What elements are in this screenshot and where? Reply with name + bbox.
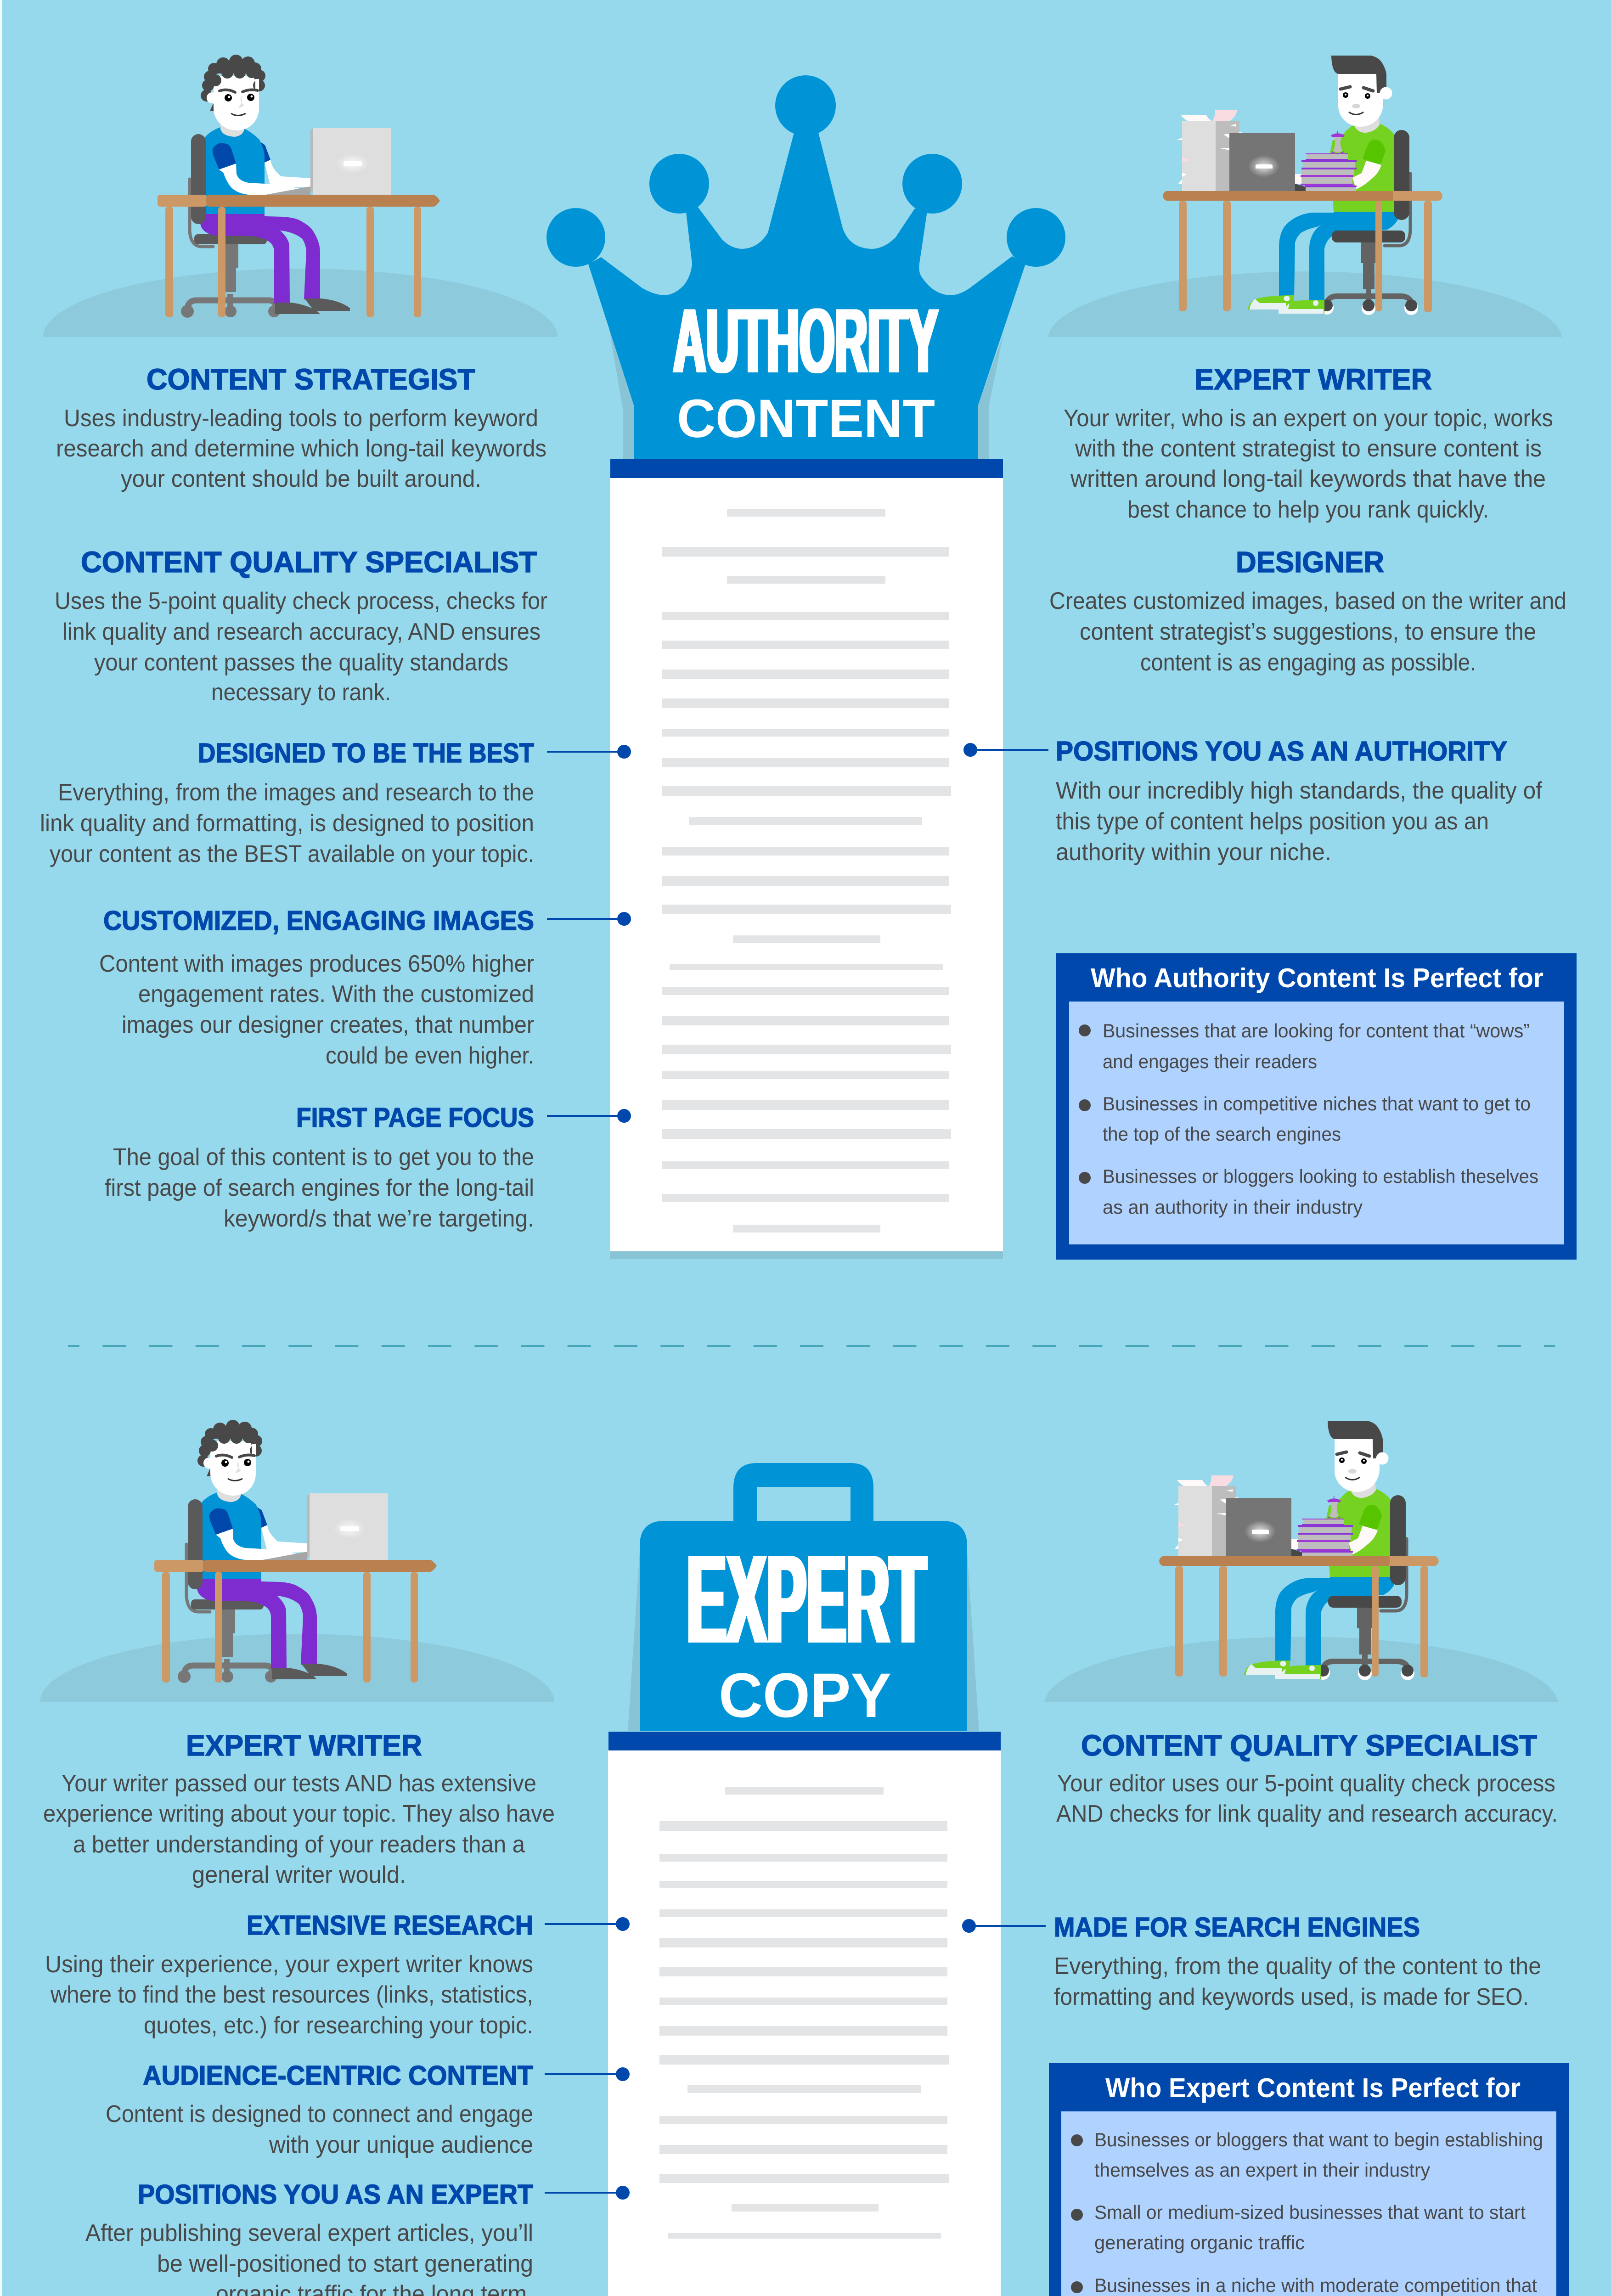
- text: expert writer: general writer would.: [192, 1862, 406, 1888]
- text: expert writer: experience writing about your topic. They also have: [43, 1801, 555, 1827]
- text: positions you as an expert: [85, 2220, 533, 2296]
- heading: positions you as an expert: POSITIONS YOU AS AN EXPERT: [138, 2179, 533, 2210]
- panel: who authority content is perfect for: [1056, 953, 1577, 1260]
- bullet list: generating organic traffic: [1094, 2232, 1305, 2253]
- heading: extensive research: EXTENSIVE RESEARCH: [247, 1910, 533, 1941]
- section: expert copy: [40, 1420, 1569, 2296]
- text: first page focus: keyword/s that we’re targeting.: [224, 1205, 534, 1232]
- text: extensive research: Using their experience, your expert writer knows: [45, 1951, 533, 1978]
- bullet list: and engages their readers: [1103, 1051, 1317, 1072]
- text: content quality specialist: Uses the 5-point quality check process, checks for: [55, 588, 547, 614]
- section: authority content: [40, 55, 1577, 1260]
- text: expert writer: [1064, 405, 1553, 523]
- heading: audience-centric content: AUDIENCE-CENTRIC CONTENT: [143, 2060, 533, 2091]
- text: first page focus: The goal of this content is to get you to the: [113, 1144, 534, 1171]
- text: made for search engines: Everything, from the quality of the content to the: [1054, 1953, 1541, 1980]
- connector: made for search engines: [962, 1919, 1046, 1933]
- heading: customized engaging images: CUSTOMIZED, ENGAGING IMAGES: [103, 906, 534, 936]
- icon: briefcase with title: [628, 1463, 979, 1731]
- text: customized engaging images: images our designer creates, that number: [122, 1012, 534, 1038]
- text: designer: content strategist’s suggestions, to ensure the: [1080, 619, 1536, 645]
- bullet list: Businesses or bloggers looking to establish theselves: [1103, 1165, 1538, 1187]
- icon: crown with title: AUTHORITY: [673, 290, 938, 392]
- illustration: expert writer at desk: [1048, 56, 1562, 337]
- heading: content quality specialist: CONTENT QUALITY SPECIALIST: [81, 546, 537, 579]
- bullet list: Businesses that are looking for content that “wows”: [1103, 1020, 1530, 1041]
- connector: designed to be the best: [547, 745, 631, 759]
- text: made for search engines: [1054, 1953, 1541, 2010]
- heading: designer: DESIGNER: [1236, 546, 1384, 579]
- text: customized engaging images: could be even higher.: [326, 1042, 534, 1069]
- document page: [610, 459, 1003, 1259]
- text: content quality specialist: [1056, 1770, 1558, 1827]
- bullet list: Businesses in a niche with moderate competition that: [1094, 2274, 1537, 2296]
- connector: first page focus: [547, 1109, 631, 1123]
- bullet list: Businesses in competitive niches that want to get to: [1103, 1093, 1531, 1114]
- text: positions you as an expert: be well-positioned to start generating: [157, 2251, 533, 2277]
- heading: content strategist: CONTENT STRATEGIST: [146, 363, 475, 396]
- heading: content quality specialist: CONTENT QUALITY SPECIALIST: [1081, 1729, 1537, 1762]
- illustration: content strategist at desk: [43, 55, 558, 337]
- title: content: CONTENT: [677, 388, 935, 449]
- connector: audience-centric content: [545, 2067, 630, 2081]
- bullet list: Small or medium-sized businesses that want to start: [1094, 2201, 1526, 2223]
- text: positions you as an authority: [1056, 777, 1543, 866]
- text: content quality specialist: your content passes the quality standards: [94, 649, 508, 676]
- text: content quality specialist: Your editor uses our 5-point quality check process: [1057, 1770, 1555, 1797]
- text: customized engaging images: [99, 951, 534, 1069]
- text: positions you as an authority: this type of content helps position you as an: [1056, 808, 1489, 835]
- text: expert writer: with the content strategist to ensure content is: [1075, 435, 1542, 462]
- heading: made for search engines: MADE FOR SEARCH ENGINES: [1054, 1912, 1420, 1942]
- connector: positions you as an authority: [963, 743, 1048, 757]
- heading: designed to be the best: DESIGNED TO BE THE BEST: [198, 738, 534, 768]
- title: copy: COPY: [719, 1660, 891, 1731]
- heading: expert writer: EXPERT WRITER: [1194, 363, 1432, 396]
- text: expert writer: best chance to help you rank quickly.: [1127, 496, 1489, 523]
- text: expert writer: a better understanding of your readers than a: [73, 1831, 525, 1858]
- bullet list: as an authority in their industry: [1103, 1196, 1363, 1218]
- heading: first page focus: FIRST PAGE FOCUS: [296, 1103, 534, 1133]
- text: positions you as an authority: With our incredibly high standards, the quality of: [1056, 777, 1543, 804]
- text: content quality specialist: link quality and research accuracy, AND ensures: [62, 619, 541, 645]
- text: expert writer: [43, 1770, 555, 1888]
- text: first page focus: [105, 1144, 534, 1232]
- text: positions you as an expert: After publishing several expert articles, you’ll: [85, 2220, 533, 2246]
- text: designer: Creates customized images, based on the writer and: [1049, 588, 1566, 614]
- text: content strategist: [56, 405, 546, 492]
- heading: expert writer: EXPERT WRITER: [186, 1729, 422, 1762]
- panel title: Who Expert Content Is Perfect for: [1105, 2073, 1521, 2103]
- text: customized engaging images: engagement rates. With the customized: [138, 981, 534, 1007]
- text: made for search engines: formatting and keywords used, is made for SEO.: [1054, 1984, 1529, 2010]
- bullet list: themselves as an expert in their industry: [1094, 2159, 1430, 2181]
- text: content strategist: your content should be built around.: [121, 466, 481, 492]
- text: expert writer: written around long-tail keywords that have the: [1070, 466, 1546, 492]
- text: content strategist: Uses industry-leading tools to perform keyword: [64, 405, 538, 432]
- bullet list: Businesses or bloggers that want to begin establishing: [1094, 2129, 1543, 2150]
- text: expert writer: Your writer passed our tests AND has extensive: [62, 1770, 536, 1797]
- connector: customized engaging images: [547, 912, 631, 926]
- text: content strategist: research and determine which long-tail keywords: [56, 435, 546, 462]
- text: extensive research: [45, 1951, 533, 2039]
- panel: who expert content is perfect for: [1049, 2063, 1569, 2296]
- text: content quality specialist: AND checks for link quality and research accuracy.: [1056, 1801, 1558, 1827]
- connector: extensive research: [545, 1917, 630, 1931]
- illustration: content quality specialist at desk: [1044, 1421, 1558, 1702]
- bullet list: [1071, 2129, 1543, 2296]
- document page: [608, 1732, 1001, 2296]
- text: designed to be the best: link quality and formatting, is designed to position: [40, 810, 534, 837]
- heading: positions you as an authority: POSITIONS YOU AS AN AUTHORITY: [1056, 736, 1507, 766]
- text: extensive research: quotes, etc.) for researching your topic.: [144, 2012, 533, 2039]
- text: audience-centric content: Content is designed to connect and engage: [106, 2101, 533, 2127]
- text: designed to be the best: [40, 779, 534, 867]
- icon: briefcase with title: EXPERT: [687, 1529, 926, 1670]
- text: expert writer: Your writer, who is an expert on your topic, works: [1064, 405, 1553, 432]
- text: content quality specialist: necessary to rank.: [211, 679, 391, 706]
- text: audience-centric content: with your unique audience: [269, 2132, 533, 2158]
- text: designed to be the best: your content as the BEST available on your topic.: [50, 841, 534, 867]
- text: audience-centric content: [106, 2101, 533, 2158]
- text: first page focus: first page of search engines for the long-tail: [105, 1175, 534, 1201]
- icon: crown with title: [546, 75, 1065, 459]
- text: customized engaging images: Content with images produces 650% higher: [99, 951, 534, 977]
- text: designer: content is as engaging as possible.: [1140, 649, 1476, 676]
- connector: positions you as an expert: [545, 2186, 630, 2200]
- text: designer: [1049, 588, 1566, 676]
- illustration: expert writer at desk: [40, 1420, 554, 1702]
- text: extensive research: where to find the best resources (links, statistics,: [50, 1981, 533, 2008]
- text: content quality specialist: [55, 588, 547, 706]
- panel title: Who Authority Content Is Perfect for: [1091, 963, 1543, 993]
- text: designed to be the best: Everything, from the images and research to the: [58, 779, 534, 806]
- bullet list: the top of the search engines: [1103, 1123, 1341, 1145]
- bullet list: [1079, 1020, 1538, 1218]
- text: positions you as an authority: authority within your niche.: [1056, 839, 1331, 866]
